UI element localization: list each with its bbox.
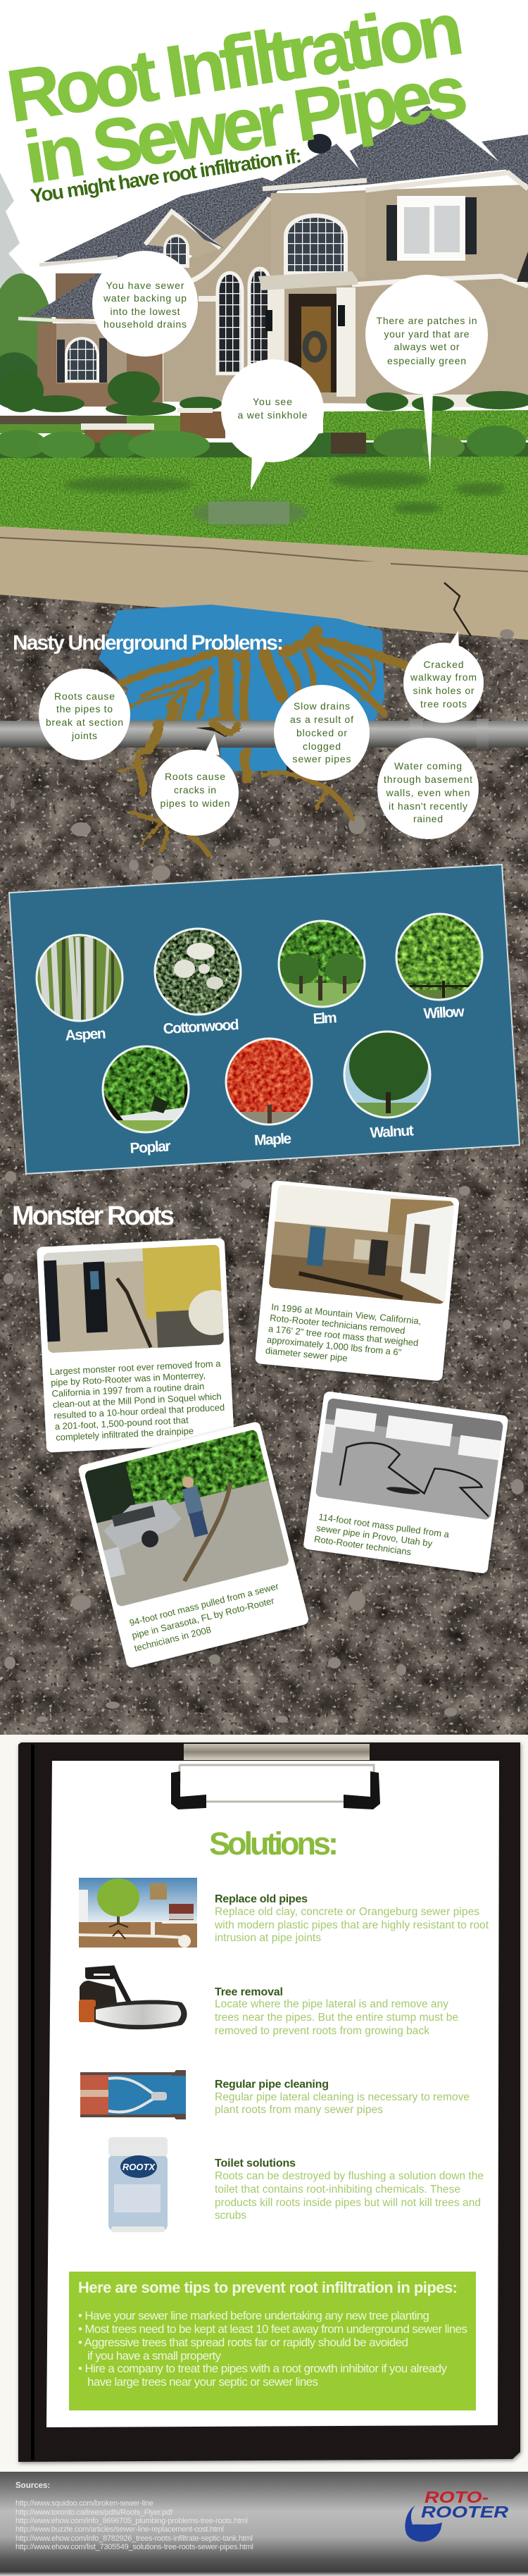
main wall: [163, 185, 528, 405]
solution image: rootx jar: ROOTX: [122, 2162, 156, 2172]
label: walnut: Walnut: [370, 1122, 414, 1141]
panel: tree species: [9, 865, 520, 1174]
tall arched windows: [218, 268, 270, 373]
low wall cap: [81, 423, 154, 430]
tips list: [78, 2309, 467, 2389]
solution text: tree removal: [215, 1998, 458, 2037]
bubble: wet patches: There are patches in: [376, 315, 477, 326]
left wing brick wall: [37, 323, 163, 407]
sources list: http://www.toronto.ca/trees/pdfs/Roots_Flyer.pdf: [15, 2508, 173, 2517]
bubble: sewer water backing up: into the lowest: [110, 306, 180, 317]
solution heading: tree removal: Tree removal: [215, 1986, 283, 1998]
dormer: [145, 210, 224, 266]
photo card: provo: Roto-Rooter technicians: [313, 1534, 413, 1557]
sidewalk: [0, 526, 528, 640]
solution text: replace old pipes: [214, 1906, 489, 1944]
bubble: pipes break at joints: the pipes to: [56, 703, 113, 714]
solution text: toilet solutions: toilet that contains root-inhibiting chemicals. These: [215, 2184, 460, 2196]
solution image: replace pipes diagram: [79, 1878, 197, 1948]
photo card: sarasota: pipe in Sarasota, FL by Roto-Rooter: [131, 1595, 276, 1641]
far right roof: [482, 135, 528, 185]
footer pipe band: [0, 2472, 528, 2576]
solution text: tree removal: removed to prevent roots from growing back: [215, 2025, 429, 2037]
wet patches: [63, 471, 505, 526]
bubble: cracked walkway: walkway from: [410, 671, 477, 683]
tree: elm: [278, 921, 366, 1008]
bubble: wet sinkhole: You see: [253, 396, 292, 407]
bubble: basement water: walls, even when: [386, 787, 470, 798]
photo card: mountain view: Roto-Rooter technicians removed: [270, 1313, 406, 1336]
left arched window: [57, 338, 107, 383]
bubble: cracks widen: cracks in: [174, 784, 216, 795]
tips list: • Aggressive trees that spread roots far or rapidly should be avoided: [78, 2336, 408, 2349]
solution heading: replace old pipes: Replace old pipes: [215, 1893, 308, 1905]
photo card: mountain view: diameter sewer pipe: [265, 1345, 348, 1363]
photo card: largest monster root: California in 1997 from a routine drain: [51, 1381, 205, 1399]
tips list: • Hire a company to treat the pipes with a root growth inhibitor if you already: [78, 2362, 448, 2375]
bubble: slow drains: sewer pipes: [293, 753, 351, 764]
bubble: cracks widen: Roots cause: [165, 771, 225, 782]
center gable roof: [263, 144, 367, 192]
lower right window: [384, 395, 482, 407]
photo card: largest monster root: clean-out at the Mill Pond in Soquel which: [53, 1391, 222, 1410]
sources list: [15, 2499, 253, 2551]
bubble: sewer water backing up: You have sewer: [106, 280, 184, 291]
bubble: cracked walkway: sink holes or: [413, 685, 474, 696]
bubble: pipes break at joints: break at section: [46, 717, 123, 728]
bubble: basement water: rained: [413, 813, 443, 824]
heading: nasty underground problems: Nasty Underground Problems:: [13, 631, 284, 655]
bubble: cracks widen: [151, 733, 239, 836]
sidewalk joint: [0, 538, 528, 571]
bubble: slow drains: blocked or: [296, 727, 347, 738]
tree: cottonwood: [155, 929, 241, 1015]
sources list: http://www.ehow.com/info_8696705_plumbing-problems-tree-roots.html: [15, 2517, 248, 2525]
left wall band: [199, 296, 220, 302]
panel: prevention tips: [69, 2272, 476, 2410]
house scene: [0, 0, 528, 640]
tree: aspen: [37, 935, 122, 1022]
left wing stucco: [56, 323, 127, 383]
tree: poplar: [101, 1046, 190, 1133]
bubble: basement water: it hasn't recently: [389, 800, 467, 812]
roof trim left: [39, 257, 118, 265]
solution text: toilet solutions: scrubs: [215, 2210, 246, 2222]
label: aspen: Aspen: [65, 1025, 106, 1044]
photo card: largest monster root: Largest monster root ever removed from a: [49, 1358, 221, 1377]
sources list: http://www.ehow.com/info_8782926_trees-roots-infiltrate-septic-tank.html: [15, 2534, 253, 2543]
photo card: provo: 114-foot root mass pulled from a: [318, 1511, 451, 1540]
solution text: regular cleaning: plant roots from many sewer pipes: [215, 2104, 383, 2116]
tips list: • Have your sewer line marked before undertaking any new tree planting: [78, 2309, 429, 2322]
water behind pipe: [99, 605, 384, 771]
photo card: largest monster root: [37, 1237, 243, 1453]
tree: maple: [226, 1039, 312, 1126]
photo card: largest monster root: pipe by Roto-Rooter was in Monterrey,: [51, 1370, 206, 1388]
middle lawn: [323, 410, 528, 440]
bubble: slow drains: as a result of: [290, 714, 353, 725]
bubble: slow drains: Slow drains: [294, 700, 350, 712]
label: cottonwood: Cottonwood: [163, 1017, 239, 1037]
clipboard: [18, 1742, 520, 2462]
solution text: toilet solutions: [215, 2170, 484, 2222]
label: elm: Elm: [313, 1010, 337, 1027]
photo card: mountain view: approximately 1,000 lbs from a 6": [266, 1335, 402, 1358]
hedge row: [0, 426, 528, 460]
photo card: mountain view: a 176' 2" tree root mass that weighed: [268, 1323, 419, 1348]
brick planter: [180, 411, 225, 438]
bubble: wet patches: [365, 275, 488, 473]
logo: roto-rooter: ROOTER: [421, 2503, 508, 2521]
root over pipe: [146, 721, 237, 753]
clip: [171, 1744, 380, 1809]
tips list: have large trees near your septic or sewer lines: [87, 2375, 318, 2389]
planter cap: [177, 408, 213, 413]
solution text: toilet solutions: products kill roots inside pipes but will not kill trees and: [215, 2197, 481, 2209]
left wing trim: [18, 318, 101, 323]
sidewalk crack: [444, 583, 471, 636]
sidewalk joint lower: [391, 564, 528, 571]
bubble: wet patches: your yard that are: [384, 328, 470, 340]
low wall: [84, 430, 151, 442]
dark arch at right edge: [517, 252, 528, 282]
bubble: pipes break at joints: joints: [71, 730, 97, 741]
bubble: wet patches: always wet or: [394, 341, 460, 352]
label: maple: Maple: [254, 1131, 292, 1149]
label: willow: Willow: [423, 1003, 465, 1022]
entry porch: [258, 271, 358, 397]
paper: [46, 1761, 499, 2427]
logo: roto-rooter: ROTO-: [425, 2488, 489, 2506]
bubble: sewer water backing up: [92, 251, 198, 357]
heading: solutions: Solutions:: [209, 1826, 339, 1862]
bubble: slow drains: clogged: [303, 741, 341, 752]
photo card: provo: [303, 1391, 509, 1574]
white curved trim: [192, 198, 270, 280]
photo card: sarasota: [77, 1421, 310, 1668]
scattered stones: [4, 629, 524, 1723]
front lawn: [0, 457, 528, 557]
upper bushes: [0, 370, 528, 416]
background trees: [0, 173, 54, 409]
solution image: pipe cleaning: [80, 2070, 186, 2119]
photo card: mountain view: [255, 1180, 460, 1381]
logo: roto-rooter: [405, 2488, 508, 2541]
tree roots: [118, 631, 408, 855]
bubble: basement water: Water coming: [394, 760, 462, 772]
photo card: largest monster root: resulted to a 10-hour ordeal that produced: [54, 1402, 225, 1420]
solution image: rootx jar: [108, 2137, 168, 2232]
sewer pipe: [0, 719, 528, 750]
solution text: tree removal: trees near the pipes. But the entire stump must be: [215, 2012, 458, 2024]
bubble: basement water: through basement: [384, 774, 472, 785]
bubble: wet sinkhole: [221, 359, 324, 490]
solution text: regular cleaning: Regular pipe lateral cleaning is necessary to remove: [215, 2091, 470, 2103]
upper center wall block: [271, 193, 365, 278]
solution heading: toilet solutions: Toilet solutions: [215, 2157, 296, 2169]
label: poplar: Poplar: [130, 1138, 171, 1157]
solution text: toilet solutions: Roots can be destroyed by flushing a solution down the: [215, 2170, 484, 2182]
bubble: sewer water backing up: household drains: [103, 318, 187, 330]
bubble: cracked walkway: [403, 631, 484, 723]
bubble: wet sinkhole: a wet sinkhole: [238, 409, 308, 421]
bubble: cracked walkway: Cracked: [424, 659, 463, 670]
tree: walnut: [344, 1030, 430, 1124]
solution text: replace old pipes: intrusion at pipe joints: [215, 1932, 321, 1944]
solution text: replace old pipes: Replace old clay, concrete or Orangeburg sewer pipes: [215, 1906, 479, 1918]
roof trim center: [263, 180, 367, 189]
tree: willow: [396, 914, 482, 1004]
tips list: if you have a small property: [87, 2349, 221, 2363]
white wall band: [352, 276, 528, 286]
photo card: largest monster root: completely infiltrated the drainpipe: [56, 1425, 194, 1443]
bubble: sewer water backing up: water backing up: [103, 292, 187, 304]
photo card: largest monster root: a 201-foot, 1,500-pound root that: [54, 1415, 189, 1432]
right main roof: [350, 106, 508, 185]
sources list: http://www.buzzle.com/articles/sewer-line-replacement-cost.html: [15, 2525, 224, 2534]
bubble: cracks widen: pipes to widen: [161, 798, 230, 809]
solution heading: regular cleaning: Regular pipe cleaning: [215, 2079, 329, 2091]
title: in sewer pipes: in Sewer Pipes: [19, 50, 472, 199]
photo card: sarasota: 94-foot root mass pulled from a sewer: [128, 1580, 280, 1628]
soil background: [0, 592, 528, 1735]
left wing roof: [30, 273, 106, 318]
upper arched window: [286, 216, 346, 273]
bubble: pipes break at joints: Roots cause: [54, 691, 115, 702]
sources list: http://www.squidoo.com/broken-sewer-line: [15, 2499, 153, 2508]
bubble: cracked walkway: tree roots: [420, 698, 467, 710]
solution text: replace old pipes: with modern plastic pipes that are highly resistant to root: [214, 1919, 489, 1931]
tips heading: Here are some tips to prevent root infiltration in pipes:: [78, 2279, 458, 2296]
left lawn strip: [0, 416, 183, 433]
roof trim right: [365, 173, 528, 190]
main left roof: [44, 178, 282, 262]
roof vent: [308, 134, 332, 154]
tips list: • Most trees need to be kept at least 10 feet away from underground sewer lines: [78, 2322, 467, 2336]
heading: monster roots: Monster Roots: [12, 1201, 175, 1231]
bubble: pipes break at joints: [39, 669, 130, 760]
photo card: provo: sewer pipe in Provo, Utah by: [316, 1523, 434, 1549]
photo card: mountain view: In 1996 at Mountain View, California,: [271, 1301, 422, 1327]
sources heading: Sources:: [15, 2482, 50, 2490]
solution text: tree removal: Locate where the pipe lateral is and remove any: [215, 1998, 448, 2010]
subtitle: You might have root infiltration if:: [29, 144, 303, 207]
bubble: basement water: [377, 738, 479, 839]
stone wall left: [0, 416, 127, 424]
sources list: http://www.ehow.com/list_7305549_solutions-tree-roots-sewer-pipes.html: [15, 2543, 253, 2551]
bubble: slow drains: [274, 685, 370, 781]
upper brick: [56, 273, 105, 319]
solution image: chainsaw: [79, 1968, 187, 2029]
photo card: sarasota: technicians in 2008: [133, 1624, 212, 1654]
upper right window: [386, 196, 477, 261]
sidewalk front over soil: [0, 557, 528, 640]
bubble: wet patches: especially green: [387, 355, 466, 366]
solution text: regular cleaning: [215, 2091, 470, 2116]
